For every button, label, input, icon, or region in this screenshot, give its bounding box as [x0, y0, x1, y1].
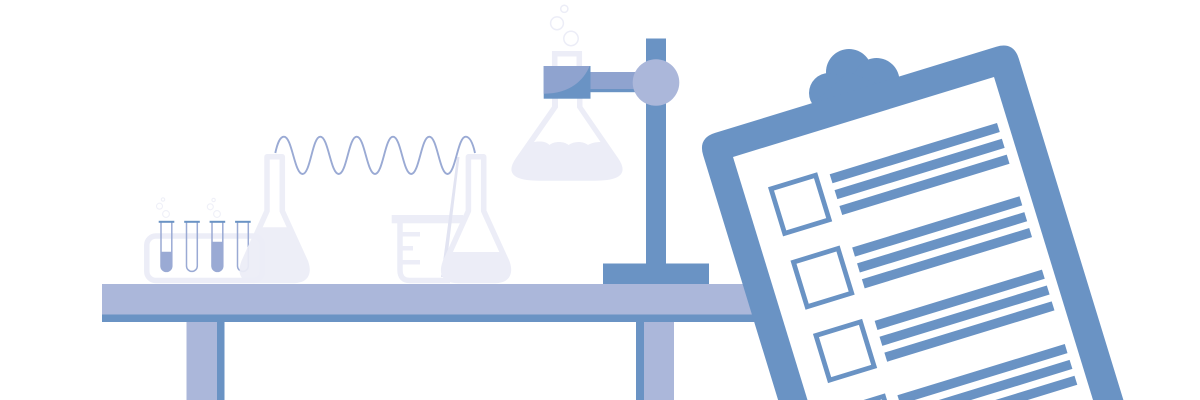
- checklist row 2: [793, 193, 1032, 307]
- stirring rod: [441, 157, 460, 277]
- checklist row 1: [771, 120, 1010, 233]
- hanging flask: [511, 54, 623, 181]
- board: [702, 45, 1123, 400]
- stand base: [603, 264, 709, 284]
- table top: [102, 284, 772, 314]
- paper: [733, 77, 1093, 400]
- table: [102, 284, 772, 400]
- retort stand: [603, 38, 709, 284]
- test tube rack: [147, 198, 262, 280]
- test tube 2: [184, 221, 200, 271]
- left erlenmeyer flask: [242, 157, 307, 281]
- checklist row 3: [816, 267, 1055, 380]
- beaker: [392, 215, 463, 280]
- clamp arm: [590, 72, 642, 92]
- checklist row 4: [864, 344, 1077, 400]
- flask bubbles: [551, 5, 578, 46]
- bubbles over test tube 3: [207, 198, 220, 217]
- right table leg: [636, 322, 674, 400]
- clipboard: [702, 45, 1123, 400]
- test tube 3: [210, 221, 225, 272]
- right erlenmeyer flask: [444, 157, 508, 281]
- clipboard clip: [809, 49, 900, 135]
- left table leg: [186, 322, 224, 400]
- stand pole: [646, 38, 666, 264]
- stand knob: [633, 59, 679, 106]
- clamp head: [544, 66, 590, 99]
- test tube 1: [159, 221, 174, 272]
- test tube 4: [235, 221, 251, 271]
- coil tube: [275, 137, 475, 174]
- bubbles over test tube 1: [156, 198, 169, 217]
